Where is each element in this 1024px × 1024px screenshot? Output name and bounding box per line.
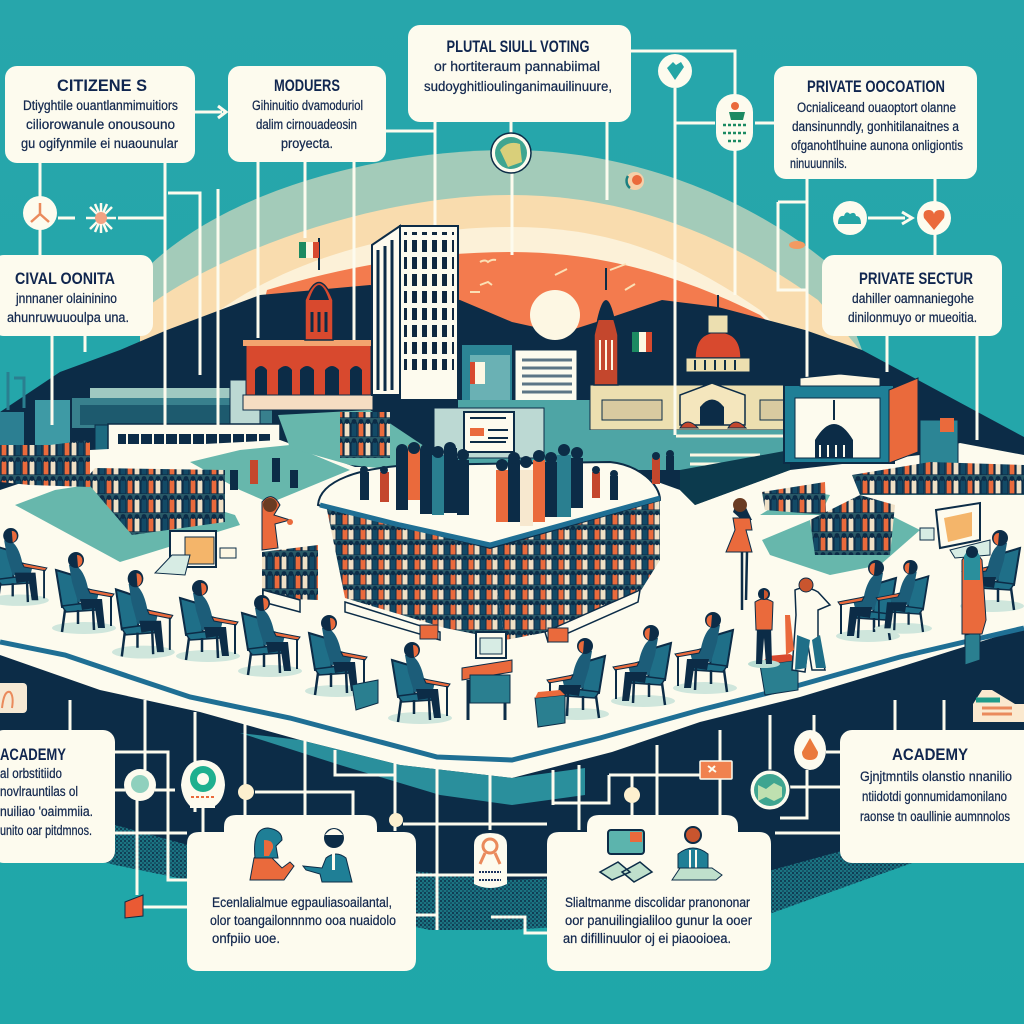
speaker woman left: [262, 497, 293, 550]
card: Academy right: Gjnjtmntils olanstio nnanilio: [860, 769, 1012, 784]
seated right 6: [960, 530, 1024, 612]
icon: team circle: [833, 201, 867, 235]
plaza display: [434, 408, 544, 458]
seated person 3: [112, 570, 175, 659]
card: Academy left: unito oar pitdmnos.: [0, 823, 92, 838]
card: Civil committee: [0, 255, 153, 336]
card: Private Ocodation: dansinunndly, gonhitilanaitnes a: [792, 119, 959, 134]
card: Civil committee: ahunruwuuoulpa una.: [7, 310, 129, 325]
card: Moduers: proyecta.: [281, 136, 333, 151]
mid buildings: [458, 345, 660, 470]
icon: small node two: [389, 813, 403, 827]
heading: academy left: ACADEMY: [0, 745, 67, 764]
heading: private ocodation: PRIVATE OOCOATION: [807, 77, 945, 96]
platform edge stripe: [0, 628, 1024, 760]
card: Private sector: dahiller oamnaniegohe: [852, 291, 974, 306]
crowds: [0, 412, 1024, 640]
card: Private sector: dinilonmuyo or mueoitia.: [848, 310, 977, 325]
card: Citizens: gu ogifynmile ei nuaounular: [21, 136, 178, 151]
birds: [470, 260, 635, 292]
plaza group left: [396, 442, 469, 515]
palace: [243, 238, 373, 410]
heading: moduers: MODUERS: [274, 76, 340, 95]
heading: academy right: ACADEMY: [892, 745, 969, 764]
card: Academy left: novlrauntilas ol: [0, 784, 78, 799]
card: Academy left: al orbstitiido: [0, 766, 62, 781]
plaza group right: [496, 444, 583, 526]
card: Citizens: [5, 66, 195, 163]
icon: man talking: [303, 828, 352, 882]
heading: civil: CIVAL OONITA: [15, 269, 115, 288]
icon: orange drop: [794, 730, 826, 770]
tag: emblem top right: [973, 690, 1024, 722]
crowd: left lawn: [85, 468, 225, 535]
sun: [530, 290, 580, 340]
seated people left: [0, 528, 452, 724]
heading: plural: PLUTAL SIULL VOTING: [446, 37, 590, 56]
tower: [372, 226, 458, 400]
card: Citizens: ciliorowanule onousouno: [26, 117, 175, 132]
icon: small node three: [624, 787, 640, 803]
card: Plural skill voting: [408, 25, 631, 122]
icon: brain circle: [124, 769, 156, 801]
seated person 7: [388, 642, 452, 724]
seated right 5: [874, 560, 932, 634]
card: Citizens: Dtiyghtile ouantlanmimuitiors: [23, 98, 178, 113]
cathedral: [585, 268, 800, 470]
icon: small node: [238, 784, 254, 800]
orange tool tag: [700, 761, 732, 779]
lawns: [15, 410, 920, 575]
crowd: far left: [0, 440, 90, 487]
connector lines behind the scene: [40, 51, 977, 440]
seated right 2: [611, 625, 675, 707]
card: bottom right data: an difillinuulor oj ei piaooioea.: [563, 931, 731, 946]
heading: citizens: CITIZENE S: [57, 76, 147, 95]
computer centre: [462, 632, 512, 720]
card: Plural skill voting: sudoyghitlioulinganimauilinuure,: [424, 79, 612, 94]
seated person 4: [176, 580, 240, 662]
seated right 1: [545, 638, 609, 720]
card: Civil committee: jnnnaner olaininino: [15, 291, 117, 306]
standing woman: [748, 588, 780, 668]
crowd: right small: [762, 482, 826, 515]
connector lines in lower field: [70, 700, 944, 933]
card: Private Ocodation: [774, 66, 977, 179]
seated person 2: [52, 552, 116, 634]
icon: globe: [491, 133, 531, 173]
card: bottom left dialogue: onfpiio uoe.: [212, 931, 280, 946]
card: bottom left dialogue: olor toangailonnnmo ooa nuaidolo: [210, 913, 396, 928]
computer right: [920, 503, 990, 558]
seated person 1: [0, 528, 49, 606]
card: Private Ocodation: ofganohtlhuine aunona onligiontis: [791, 138, 963, 153]
card: Academy left: [0, 730, 115, 863]
dark hills and lower field: [0, 285, 1024, 930]
white main platform: [0, 440, 1024, 778]
heading: private sector: PRIVATE SECTUR: [859, 269, 973, 288]
woman with teal top: [962, 546, 986, 634]
icon: gear: [181, 760, 225, 808]
crowd: right lawn: [810, 495, 895, 555]
icon: map circle: [750, 770, 790, 810]
crowd: far right: [852, 462, 1024, 495]
icon: crescent: [626, 172, 644, 190]
icon: tri-spoke circle: [23, 196, 57, 230]
card: Academy left: nuiliao 'oaimmiia.: [0, 804, 93, 819]
card: Moduers: dalim cirnouadeosin: [256, 117, 357, 132]
small plaza figures: [230, 450, 674, 502]
tag: squiggle top left: [0, 683, 27, 713]
orange blip: [789, 241, 805, 249]
card: Academy right: [840, 730, 1024, 863]
crowd: stage centre-right: [490, 495, 660, 640]
dome arc bands: [140, 150, 862, 420]
arrowhead: citizens to moduers: [218, 106, 226, 118]
crowd: stage centre-left: [325, 500, 505, 640]
box crates: [352, 632, 980, 727]
card: bottom right data: Slialtmanme discolidar pranononar: [565, 895, 750, 910]
skyline left buildings: [0, 372, 272, 452]
big screen: [680, 374, 958, 505]
card: Private Ocodation: ninuuunnils.: [790, 156, 847, 171]
flag tag: [125, 895, 143, 918]
icon: teal heart badge: [658, 54, 692, 88]
arrowhead: icon to heart: [902, 212, 912, 224]
icon: person at desk: [672, 827, 722, 880]
icon: woman talking: [250, 828, 294, 880]
ribbon tag: [474, 833, 507, 888]
icon: heart circle: [917, 201, 951, 235]
icon: monitor and papers: [600, 830, 652, 882]
card: Moduers: [228, 66, 386, 162]
card: bottom left dialogue: Ecenlalialmue egpauliasoailantal,: [212, 895, 392, 910]
icon: capsule emblem: [716, 94, 753, 151]
computer left: [155, 531, 236, 575]
seated right 4: [836, 560, 900, 642]
seated right 3: [673, 612, 737, 694]
stage railings: [263, 590, 640, 642]
standing man: [785, 578, 830, 672]
card: bottom right data: [547, 815, 771, 971]
seated person 5: [238, 595, 302, 677]
card: Plural skill voting: or hortiteraum pannabiimal: [434, 59, 600, 74]
icon: sunburst: [86, 203, 116, 233]
seated person 6: [305, 615, 369, 697]
crowd: near speaker: [262, 545, 318, 600]
long white hall: [95, 424, 280, 450]
card: Private Ocodation: Ocnialiceand ouaoptort olanne: [797, 100, 956, 115]
center plaza: [318, 462, 660, 548]
crowd: behind palace: [340, 412, 390, 458]
card: Private sector: [822, 255, 1002, 336]
card: Moduers: Gihinuitio dvamoduriol: [252, 98, 363, 113]
card: bottom right data: oor panuilingialiloo gunur la ooer: [565, 913, 752, 928]
seated people right: [545, 530, 1024, 720]
speaker woman right in orange dress: [726, 498, 752, 610]
card: bottom left dialogue: [187, 815, 416, 971]
teal band below platform: [240, 733, 585, 805]
